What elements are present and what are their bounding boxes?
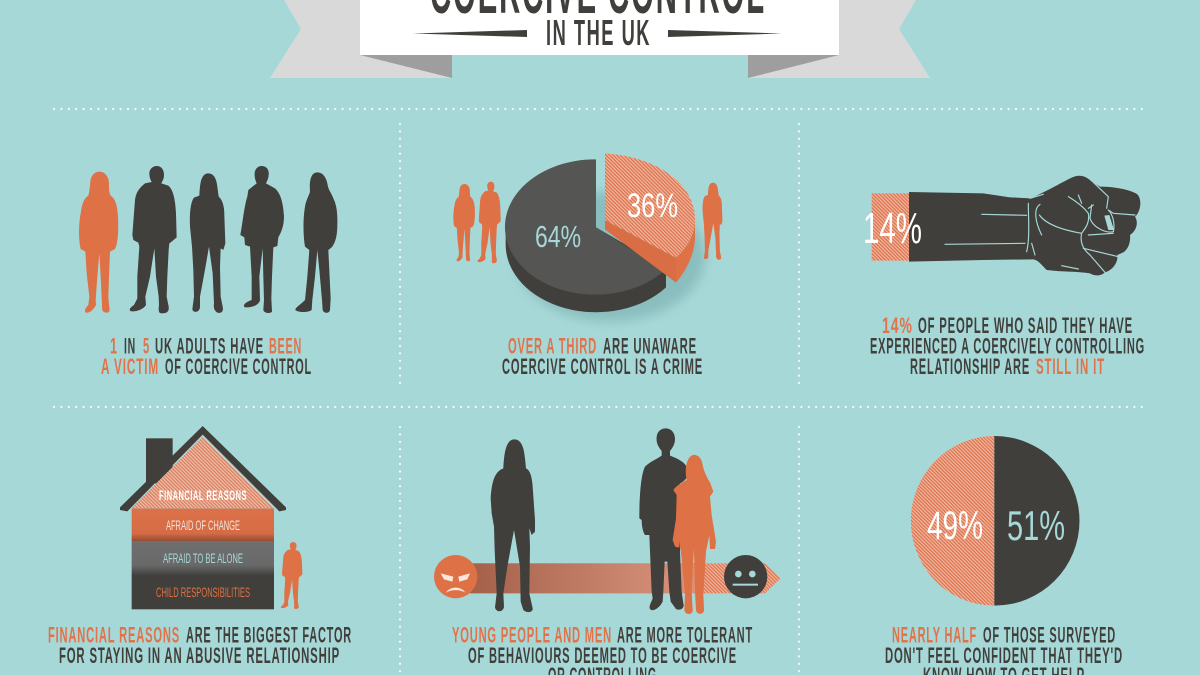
small figures — [453, 182, 722, 263]
caption: OF BEHAVIOURS DEEMED TO BE COERCIVE — [468, 643, 737, 668]
label child responsibilities: CHILD RESPONSIBILITIES — [156, 584, 250, 600]
label 51%: 51% — [1007, 502, 1065, 549]
panel: nearly half — [885, 436, 1123, 675]
caption — [452, 622, 753, 675]
text: ARE THE BIGGEST FACTOR — [186, 622, 352, 648]
label afraid of change: AFRAID OF CHANGE — [166, 517, 240, 533]
silhouettes — [491, 428, 716, 614]
panel: over a third unaware — [453, 153, 722, 379]
caption: 1 — [110, 334, 118, 358]
title banner — [270, 0, 930, 78]
label 36%: 36% — [627, 187, 678, 225]
panel: 1 in 5 adults: OF COERCIVE CONTROL — [165, 354, 312, 379]
caption: RELATIONSHIP ARE — [910, 354, 1030, 379]
caption: BEEN — [269, 334, 302, 358]
caption: A VICTIM — [101, 354, 159, 379]
label afraid to be alone: AFRAID TO BE ALONE — [163, 550, 243, 566]
caption: YOUNG PEOPLE AND MEN — [452, 622, 612, 648]
caption: IN — [124, 334, 136, 358]
caption — [502, 334, 703, 379]
banner panel — [360, 0, 839, 55]
caption: UK ADULTS HAVE — [155, 334, 264, 358]
ribbon tails — [270, 0, 930, 78]
label 14%: 14% — [863, 204, 922, 253]
subtitle rules — [413, 30, 782, 37]
panel: 1 in 5 adults — [79, 166, 337, 379]
icon: fist — [872, 176, 1140, 275]
caption — [870, 313, 1145, 379]
caption: STILL IN IT — [1036, 354, 1105, 379]
icon: neutral face — [724, 555, 767, 598]
pie chart 49 / 51 — [911, 436, 1079, 606]
subtitle text: IN THE UK — [546, 12, 651, 53]
caption — [48, 622, 352, 668]
panel: still in relationship — [863, 176, 1145, 379]
caption: COERCIVE CONTROL IS A CRIME — [502, 354, 703, 379]
caption: ARE UNAWARE — [603, 334, 697, 358]
panel: young people and men — [434, 428, 781, 675]
caption: ARE MORE TOLERANT — [617, 622, 753, 648]
caption: 5 — [143, 334, 150, 358]
label financial reasons: FINANCIAL REASONS — [159, 487, 247, 503]
icon: angry face — [434, 555, 477, 598]
caption: 14% — [882, 313, 913, 338]
tolerance scale — [434, 428, 781, 614]
caption: NEARLY HALF — [892, 622, 977, 648]
label 64%: 64% — [535, 219, 581, 254]
caption — [101, 334, 312, 379]
icon: house — [120, 426, 302, 609]
panel: financial reasons — [48, 426, 352, 668]
caption: OVER A THIRD — [508, 334, 597, 358]
caption: FOR STAYING IN AN ABUSIVE RELATIONSHIP — [59, 643, 340, 668]
ribbon folds — [360, 55, 839, 78]
caption — [885, 622, 1123, 675]
pie chart 36 / 64 — [453, 153, 722, 322]
caption: FINANCIAL REASONS — [48, 622, 180, 648]
icon: five silhouettes — [79, 166, 337, 313]
label 49%: 49% — [927, 504, 983, 548]
